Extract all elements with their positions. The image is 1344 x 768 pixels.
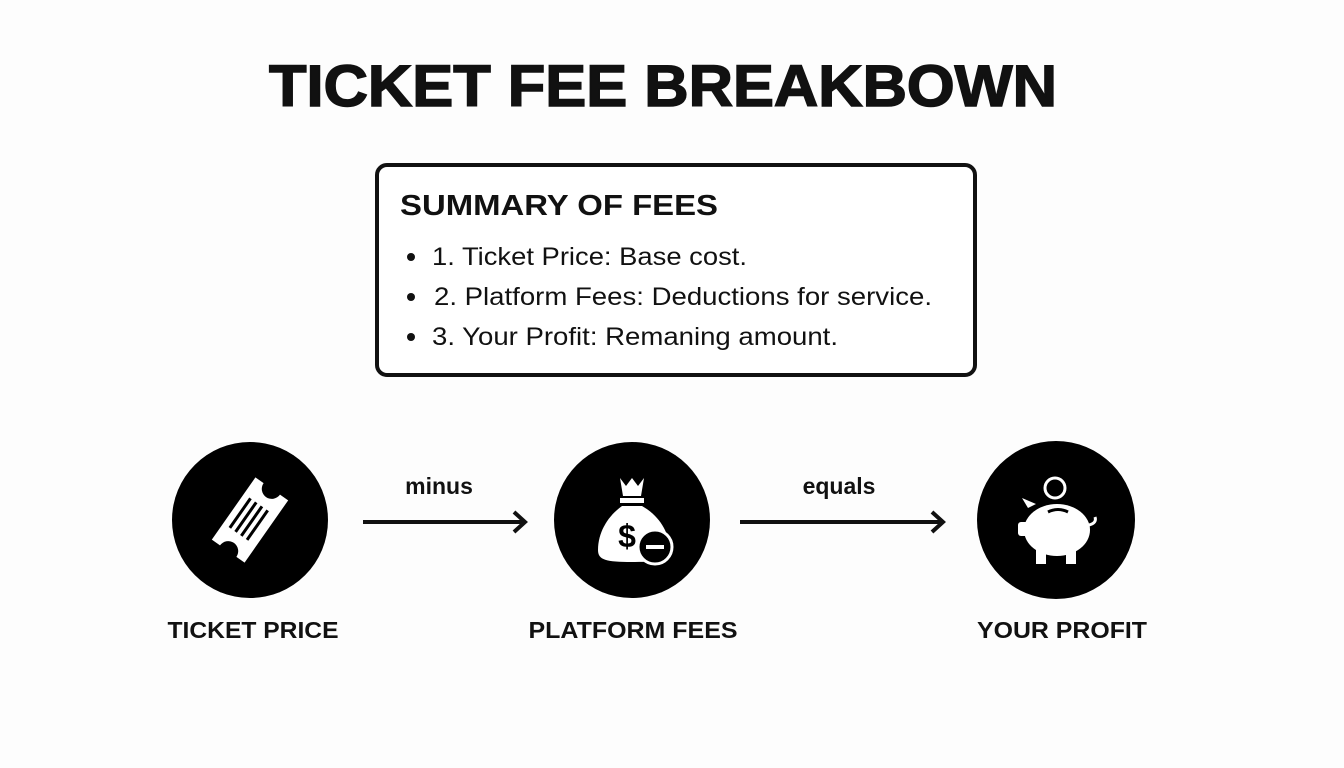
panel: summary of fees: [377, 165, 975, 375]
icon: piggy bank: [977, 441, 1135, 599]
summary list: 3. Your Profit: Remaning amount.: [432, 323, 838, 351]
icon: money bag: $: [618, 518, 636, 554]
arrow: minus: minus: [405, 473, 473, 499]
arrow: equals: equals: [803, 473, 875, 499]
arrow: equals: [740, 473, 943, 532]
icon: money bag: [554, 442, 710, 598]
summary list: 1. Ticket Price: Base cost.: [432, 243, 747, 271]
label: platform fees: PLATFORM FEES: [528, 617, 738, 643]
title: TICKET FEE BREAKBOWN: [269, 54, 1057, 119]
label: ticket price: TICKET PRICE: [168, 617, 338, 643]
label: your profit: YOUR PROFIT: [977, 617, 1147, 643]
summary heading: SUMMARY OF FEES: [400, 190, 718, 222]
arrow: minus: [363, 473, 525, 532]
summary list: 2. Platform Fees: Deductions for service.: [434, 283, 932, 311]
summary list: [407, 243, 932, 351]
icon: ticket: [172, 442, 328, 598]
